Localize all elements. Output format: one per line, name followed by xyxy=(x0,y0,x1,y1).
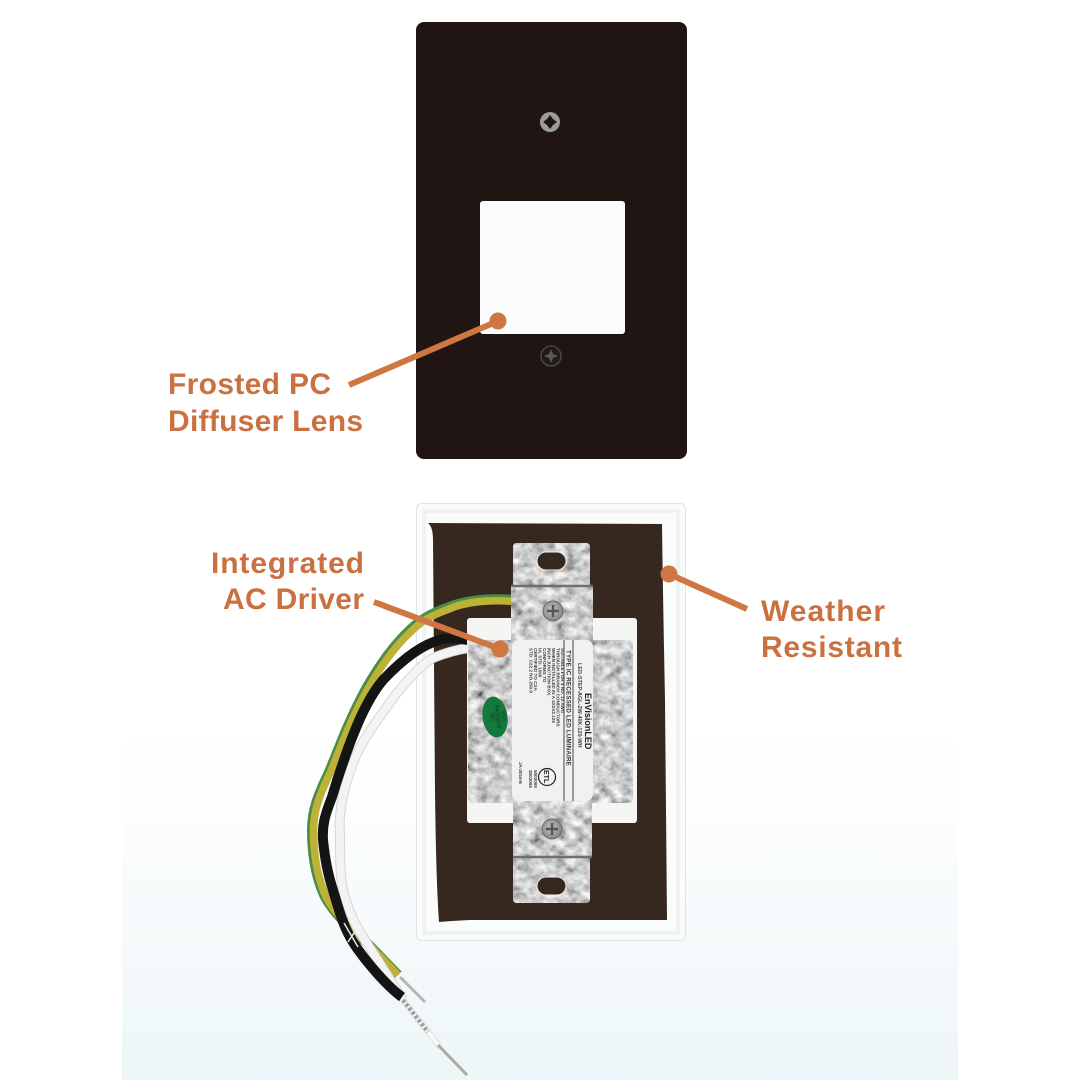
label xyxy=(761,595,902,664)
white neutral wire xyxy=(340,648,468,1075)
product label xyxy=(512,640,593,801)
bracket metal texture xyxy=(468,543,633,903)
label xyxy=(211,547,364,616)
ETL mark: ETL xyxy=(542,770,549,784)
callout: weather resistant xyxy=(660,566,902,664)
rear housing xyxy=(416,504,686,940)
leader line xyxy=(374,602,500,649)
lead wires xyxy=(312,599,514,1075)
label text: TYPE IC RECESSED LED LUMINAIRE xyxy=(564,650,572,766)
label: Diffuser Lens xyxy=(168,405,363,438)
white outer housing xyxy=(416,504,686,940)
neutral conductor xyxy=(438,1045,467,1075)
green QC sticker xyxy=(480,695,510,739)
ground conductor xyxy=(400,977,425,1002)
label: AC Driver xyxy=(223,583,364,616)
green-yellow ground wire xyxy=(312,599,514,1002)
label xyxy=(168,368,363,438)
stripped neutral section xyxy=(403,1000,440,1047)
black hot wire xyxy=(323,638,468,997)
label text: UL STD. 1598 xyxy=(538,648,542,678)
brown backing sheet xyxy=(428,523,667,922)
label text: THROUGH BRANCH CONDUCTORS xyxy=(556,648,560,727)
leader dot xyxy=(492,640,508,658)
label text: CERTIFIED TO CSA xyxy=(533,648,538,691)
leader line xyxy=(669,574,747,609)
bottom slot xyxy=(537,877,566,895)
green QC sticker: 2021 xyxy=(499,710,507,722)
top slot xyxy=(537,552,566,570)
frosted lens window xyxy=(480,201,625,334)
label text: 5003095 xyxy=(533,770,538,788)
leader dot xyxy=(490,312,506,330)
callout: frosted PC diffuser lens xyxy=(168,312,506,438)
leader line xyxy=(349,321,498,385)
label text: 3003095 xyxy=(528,770,533,788)
label text: EnVisionLED xyxy=(583,693,593,750)
label: Integrated xyxy=(211,547,364,580)
leader dot xyxy=(660,566,678,582)
galvanized bracket xyxy=(468,543,633,903)
label text xyxy=(518,648,593,788)
green QC sticker: PASSED xyxy=(492,704,502,730)
label text: INCH JUNCTION BOX. xyxy=(546,648,552,696)
green QC sticker: QC xyxy=(488,713,496,723)
bottom fold xyxy=(513,856,592,858)
label: Frosted PC xyxy=(168,368,331,401)
wire print xyxy=(344,923,358,947)
ETL mark xyxy=(538,768,556,786)
label text: WHEN INSTALLED IN A 4X2X2.125 xyxy=(551,648,556,723)
label text: CONFORMS TO xyxy=(542,648,547,683)
label: Weather xyxy=(761,595,885,628)
white mounting pad xyxy=(467,618,637,823)
background gradient panel xyxy=(122,728,958,1080)
bottom screw xyxy=(541,346,561,366)
upper bracket screw xyxy=(543,601,563,621)
front cover plate xyxy=(416,22,687,459)
label text: JA-2016-E xyxy=(518,762,523,784)
label text: STD. C22.2 NO.250.0 xyxy=(528,648,534,693)
label text: LED-STEP-AGL-2W-40K-120-WH xyxy=(576,663,582,748)
label: Resistant xyxy=(761,631,902,664)
lower bracket screw xyxy=(542,819,562,839)
label text: SUITABLE FOR 4 NO. 12 AWG xyxy=(560,648,565,714)
top fold xyxy=(511,585,593,587)
callout: integrated AC driver xyxy=(211,547,508,658)
top screw xyxy=(540,112,560,132)
